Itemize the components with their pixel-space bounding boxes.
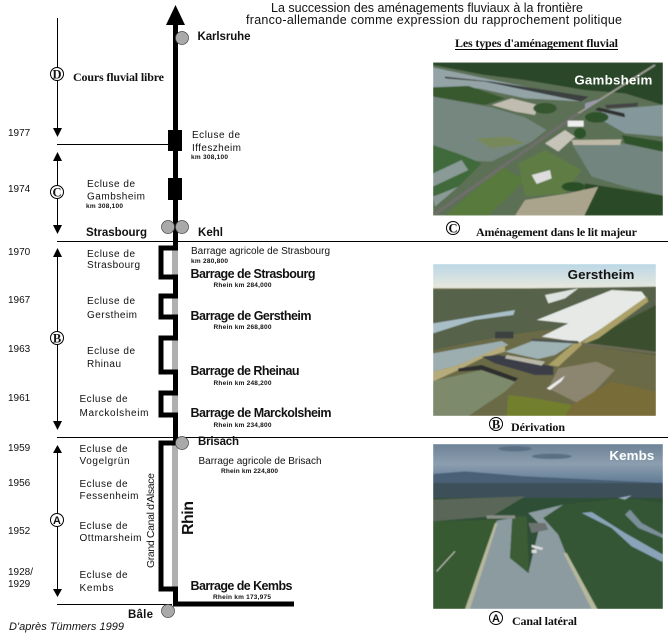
lock and dam labels right: km 280,800 bbox=[191, 258, 228, 265]
lock and dam labels right: Barrage de Gerstheim bbox=[190, 309, 312, 323]
title: La succession des aménagements fluviaux à la frontière bbox=[271, 1, 583, 15]
source credit: D'après Tümmers 1999 bbox=[9, 621, 124, 633]
photo: Gambsheim bbox=[433, 62, 663, 216]
timeline arrow D: D bbox=[52, 68, 62, 82]
lock labels left: Ecluse de bbox=[87, 249, 135, 260]
years: 1967 bbox=[8, 295, 31, 306]
lock labels left: Cours fluvial libre bbox=[73, 70, 165, 84]
years: 1963 bbox=[8, 344, 31, 355]
Rhin old course in grey bbox=[172, 248, 178, 589]
years: 1928/ bbox=[8, 567, 33, 578]
right column heading: Les types d'aménagement fluvial bbox=[455, 36, 619, 50]
caption B: B bbox=[492, 418, 500, 432]
years bbox=[8, 128, 33, 590]
caption B bbox=[490, 418, 565, 434]
lock and dam labels right: Ecluse de bbox=[192, 130, 240, 141]
river schematic bbox=[161, 5, 294, 618]
timeline arrow D bbox=[50, 18, 64, 137]
lock labels left: Fessenheim bbox=[80, 491, 138, 502]
lock labels left: Marckolsheim bbox=[80, 408, 148, 419]
lock and dam labels right: Rhein km 173,975 bbox=[213, 594, 271, 601]
lock labels left: Strasbourg bbox=[87, 260, 140, 271]
lock labels left: Rhinau bbox=[87, 359, 121, 370]
lock labels left: Ecluse de bbox=[80, 479, 128, 490]
timeline arrow B: B bbox=[53, 332, 61, 346]
lock and dam labels right: Rhein km 224,800 bbox=[221, 468, 278, 475]
caption C: C bbox=[448, 222, 458, 236]
lock labels left: Ecluse de bbox=[80, 444, 128, 455]
lock labels left bbox=[73, 70, 165, 621]
photo label: Gambsheim bbox=[574, 73, 652, 88]
lock labels left: Strasbourg bbox=[86, 227, 147, 239]
horizontal section dividers bbox=[57, 144, 668, 604]
lock and dam labels right: Barrage de Rheinau bbox=[190, 364, 300, 378]
lock and dam labels right: Karlsruhe bbox=[198, 31, 250, 43]
rotated label: Rhin: Rhin bbox=[180, 501, 197, 535]
lock and dam labels right: Barrage agricole de Brisach bbox=[198, 456, 322, 467]
lock Iffezheim bbox=[168, 130, 182, 151]
photo: Kembs bbox=[433, 444, 663, 609]
caption A: Canal latéral bbox=[512, 614, 578, 628]
lock and dam labels right: Iffeszheim bbox=[192, 143, 241, 154]
years: 1974 bbox=[8, 184, 31, 195]
lock Gambsheim bbox=[168, 178, 182, 200]
lock and dam labels right: Rhein km 234,800 bbox=[214, 422, 272, 429]
title: franco-allemande comme expression du rapprochement politique bbox=[246, 13, 622, 27]
lock and dam labels right: Barrage de Kembs bbox=[190, 579, 293, 593]
city markers bbox=[162, 32, 188, 618]
photo label: Kembs bbox=[609, 448, 654, 463]
lock labels left: Ecluse de bbox=[80, 521, 128, 532]
arrow head north bbox=[166, 5, 185, 25]
caption A bbox=[490, 612, 578, 628]
caption C bbox=[446, 222, 638, 239]
lock labels left: Vogelgrün bbox=[80, 456, 130, 467]
timeline arrow B bbox=[50, 248, 64, 430]
lock and dam labels right: Rhein km 248,200 bbox=[214, 380, 272, 387]
title bbox=[246, 1, 622, 27]
lock and dam labels right: Brisach bbox=[198, 436, 239, 448]
lock labels left: Ecluse de bbox=[87, 179, 135, 190]
lock labels left: Ecluse de bbox=[80, 394, 128, 405]
lock labels left: Gerstheim bbox=[87, 310, 137, 321]
timeline arrow A bbox=[50, 445, 64, 597]
lock and dam labels right: Barrage de Marckolsheim bbox=[190, 406, 332, 420]
lock labels left: Kembs bbox=[80, 583, 114, 594]
timeline arrow C: C bbox=[52, 186, 62, 200]
lock and dam labels right: Rhein km 268,800 bbox=[214, 324, 272, 331]
lock labels left: km 308,100 bbox=[86, 203, 123, 210]
lock and dam labels right: km 308,100 bbox=[191, 154, 228, 161]
lock labels left: Ecluse de bbox=[80, 570, 128, 581]
timeline arrow C bbox=[50, 152, 64, 234]
caption C: Aménagement dans le lit majeur bbox=[476, 225, 638, 239]
lock and dam labels right: Barrage agricole de Strasbourg bbox=[191, 246, 330, 257]
years: 1929 bbox=[8, 579, 31, 590]
timeline arrow A: A bbox=[53, 515, 61, 527]
years: 1959 bbox=[8, 443, 31, 454]
lock labels left: Ottmarsheim bbox=[80, 533, 142, 544]
lock and dam labels right: Kehl bbox=[198, 227, 223, 239]
years: 1977 bbox=[8, 128, 31, 139]
years: 1970 bbox=[8, 247, 31, 258]
lock and dam labels right bbox=[190, 31, 332, 601]
lock and dam labels right: Rhein km 284,000 bbox=[214, 282, 272, 289]
caption A: A bbox=[492, 613, 500, 625]
years: 1961 bbox=[8, 393, 31, 404]
lock labels left: Ecluse de bbox=[87, 296, 135, 307]
years: 1952 bbox=[8, 526, 31, 537]
main channel with canal bypasses bbox=[161, 22, 294, 604]
photo: Gerstheim bbox=[433, 264, 656, 416]
lock labels left: Gambsheim bbox=[87, 192, 145, 202]
years: 1956 bbox=[8, 478, 31, 489]
lock labels left: Bâle bbox=[128, 609, 153, 621]
rotated label: Grand Canal d'Alsace: Grand Canal d'Alsace bbox=[145, 473, 157, 568]
photo label: Gerstheim bbox=[568, 267, 634, 282]
lock labels left: Ecluse de bbox=[87, 346, 135, 357]
caption B: Dérivation bbox=[511, 420, 565, 434]
lock and dam labels right: Barrage de Strasbourg bbox=[190, 267, 316, 281]
